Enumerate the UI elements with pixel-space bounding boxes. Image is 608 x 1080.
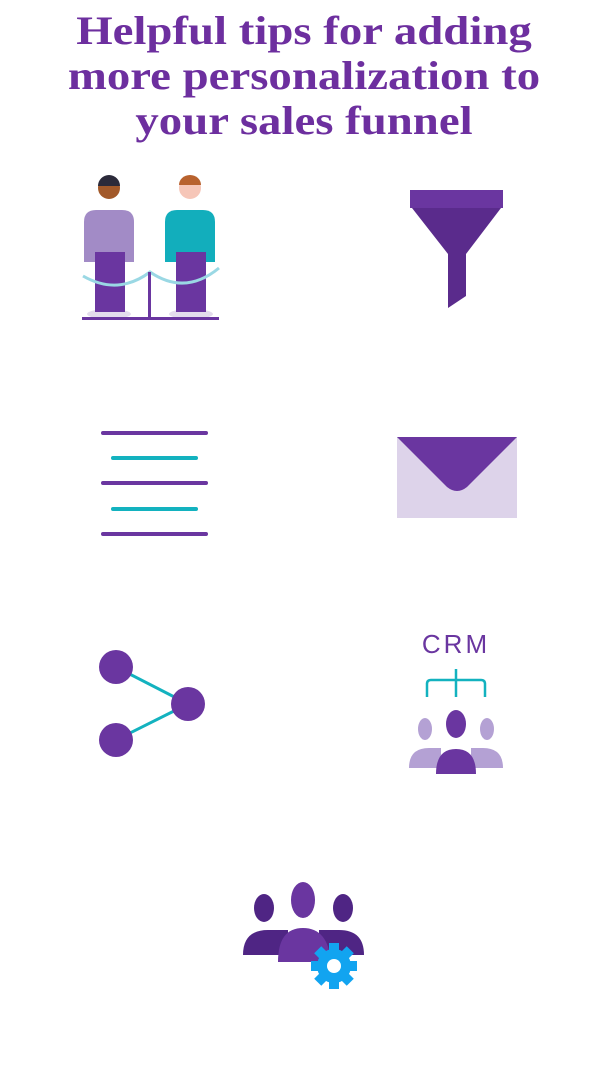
icon: text lines (103, 433, 206, 534)
title: more personalization to (68, 53, 540, 98)
icon: CRM team: CRM (422, 629, 490, 659)
icon: envelope (397, 437, 517, 518)
title (68, 8, 540, 143)
icon: funnel (410, 190, 503, 308)
icon: CRM team (409, 629, 503, 774)
icon: two people at rope (82, 175, 219, 320)
title: Helpful tips for adding (76, 8, 532, 53)
icon: team with gear (243, 882, 364, 989)
title: your sales funnel (135, 98, 473, 143)
icon: share (99, 650, 205, 757)
